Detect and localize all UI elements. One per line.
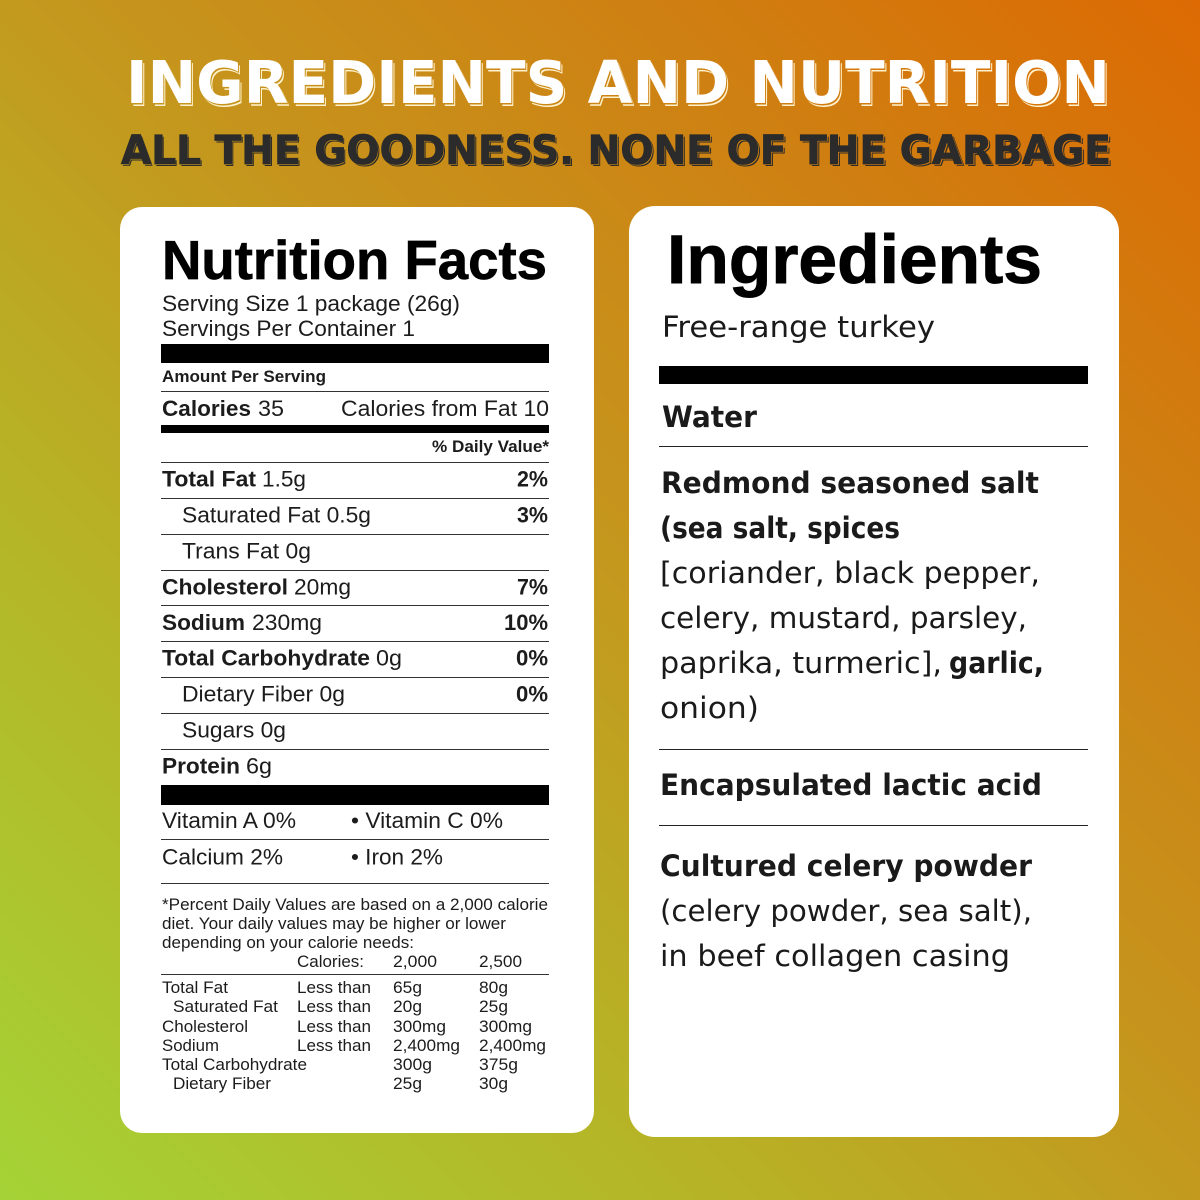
ingredient: seasoned salt: celery, mustard, parsley, <box>660 601 1027 635</box>
footnote: 25g <box>479 997 508 1016</box>
footnote: 20g <box>393 997 422 1016</box>
nutrition table: Calories from Fat 10 <box>341 396 549 421</box>
footnote: 65g <box>393 978 422 997</box>
serving info: Servings Per Container 1 <box>162 316 415 341</box>
footnote: *Percent Daily Values are based on a 2,000 calorie <box>162 895 548 914</box>
subtitle: ALL THE GOODNESS. NONE OF THE GARBAGE <box>121 128 1111 174</box>
nutrition facts heading: Nutrition Facts <box>162 229 547 291</box>
subtitle: ALL THE GOODNESS. NONE OF THE GARBAGE <box>122 129 1112 175</box>
nutrition table: Saturated Fat 0.5g <box>182 502 371 528</box>
nutrition table: Amount Per Serving <box>162 368 326 386</box>
footnote: Less than <box>297 997 371 1016</box>
ingredient: seasoned salt: onion) <box>660 691 759 725</box>
nutrition table <box>161 344 550 884</box>
ingredient: celery powder: (celery powder, sea salt), <box>660 894 1032 928</box>
footnote: Less than <box>297 1036 371 1055</box>
nutrition table: 7% <box>517 574 548 600</box>
nutrition table: 20mg <box>294 574 351 600</box>
footnote <box>161 895 549 1093</box>
ingredient: seasoned salt: Redmond seasoned salt <box>661 466 1039 500</box>
ingredient: turkey: Free-range turkey <box>662 310 935 344</box>
footnote: 30g <box>479 1074 508 1093</box>
footnote: 2,500 <box>479 952 522 971</box>
ingredient: seasoned salt: (sea salt, spices <box>660 511 900 545</box>
footnote: 25g <box>393 1074 422 1093</box>
title: INGREDIENTS AND NUTRITION <box>127 50 1111 118</box>
nutrition table: 2% <box>517 466 548 492</box>
footnote: 2,000 <box>393 952 437 971</box>
nutrition table: Total Fat <box>162 466 257 492</box>
footnote: 300g <box>393 1055 432 1074</box>
footnote: 375g <box>479 1055 518 1074</box>
ingredient: seasoned salt: [coriander, black pepper, <box>660 556 1040 590</box>
ingredient: water: Water <box>662 400 758 434</box>
serving info: Serving Size 1 package (26g) <box>162 291 460 316</box>
nutrition table: Sugars 0g <box>182 718 286 742</box>
footnote: Dietary Fiber <box>173 1074 271 1093</box>
nutrition table: 230mg <box>252 610 322 635</box>
footnote: Sodium <box>162 1036 219 1055</box>
footnote: diet. Your daily values may be higher or lower <box>162 914 506 933</box>
ingredient: seasoned salt <box>660 466 1044 725</box>
serving info <box>162 291 460 341</box>
ingredient: seasoned salt: paprika, turmeric], <box>660 646 942 680</box>
footnote: Cholesterol <box>162 1017 248 1036</box>
nutrition table: 35 <box>258 396 284 421</box>
nutrition table: Protein <box>162 754 240 778</box>
footnote: Total Fat <box>162 978 228 997</box>
nutrition table: Cholesterol <box>162 574 288 600</box>
footnote: Less than <box>297 1017 371 1036</box>
nutrition table: • Vitamin C 0% <box>351 808 503 833</box>
ingredients heading: Ingredients <box>667 221 1042 298</box>
nutrition table: % Daily Value* <box>432 438 550 456</box>
footnote: Less than <box>297 978 371 997</box>
nutrition table: • Iron 2% <box>351 844 443 870</box>
ingredient: lactic acid: Encapsulated lactic acid <box>660 768 1042 802</box>
nutrition table: Calories <box>162 396 251 421</box>
footnote: 300mg <box>479 1017 532 1036</box>
panel: nutrition facts <box>120 207 594 1133</box>
footnote: 2,400mg <box>479 1036 546 1055</box>
footnote: Calories: <box>297 952 364 971</box>
footnote: 2,400mg <box>393 1036 460 1055</box>
nutrition table: Total Carbohydrate <box>162 646 370 670</box>
nutrition table: Trans Fat 0g <box>182 538 311 564</box>
nutrition table: 6g <box>246 754 272 778</box>
nutrition table: 0% <box>516 682 548 706</box>
nutrition table: Calcium 2% <box>162 844 283 870</box>
footnote: Saturated Fat <box>173 997 278 1016</box>
nutrition table: 3% <box>517 502 548 528</box>
nutrition table: 0g <box>376 646 402 670</box>
footnote: Total Carbohydrate <box>162 1055 307 1074</box>
ingredient: celery powder <box>660 849 1033 973</box>
nutrition table: 1.5g <box>262 466 306 492</box>
nutrition table: Dietary Fiber 0g <box>182 682 345 706</box>
footnote: 300mg <box>393 1017 446 1036</box>
ingredient: celery powder: Cultured celery powder <box>660 849 1033 883</box>
panel: ingredients <box>629 206 1119 1137</box>
nutrition table: 10% <box>504 610 548 635</box>
title: INGREDIENTS AND NUTRITION <box>126 48 1110 117</box>
ingredient: celery powder: in beef collagen casing <box>660 939 1010 973</box>
nutrition table: Vitamin A 0% <box>162 808 296 833</box>
title: INGREDIENTS AND NUTRITION <box>128 51 1112 120</box>
footnote: 80g <box>479 978 508 997</box>
footnote: depending on your calorie needs: <box>162 933 414 952</box>
nutrition table: Sodium <box>162 610 245 635</box>
subtitle: ALL THE GOODNESS. NONE OF THE GARBAGE <box>122 130 1114 176</box>
nutrition table: 0% <box>516 646 548 670</box>
ingredient: seasoned salt: garlic, <box>949 646 1044 680</box>
